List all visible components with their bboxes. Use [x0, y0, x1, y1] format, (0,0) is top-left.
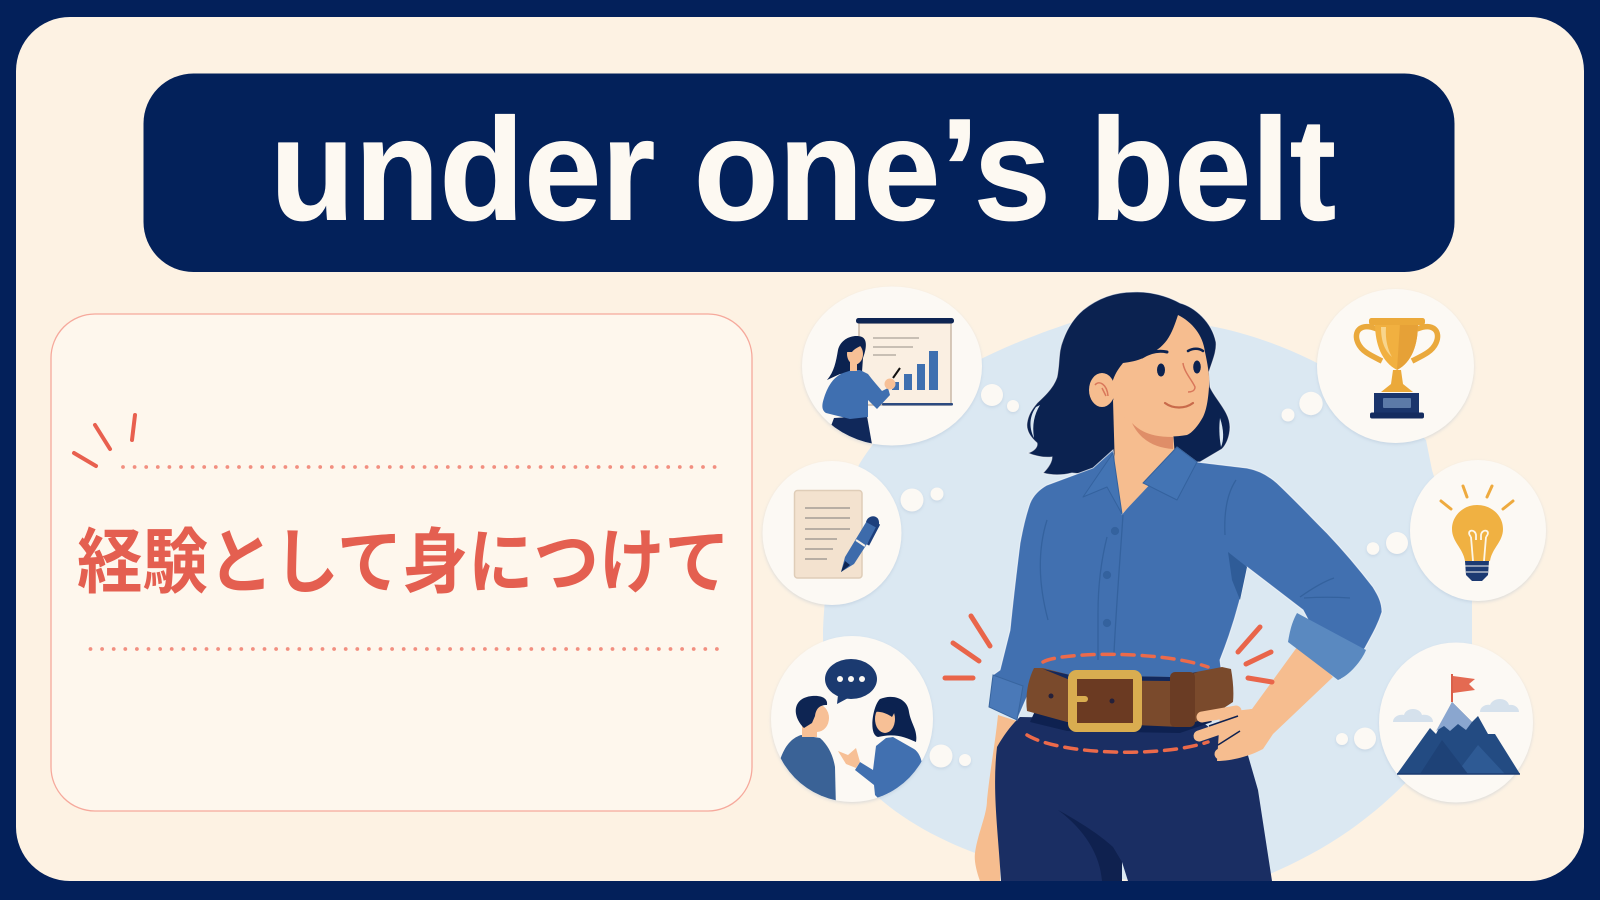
circle: trophy	[1317, 289, 1474, 443]
shirt	[989, 447, 1382, 720]
face	[1113, 315, 1209, 436]
icon: mountain with flag	[1397, 674, 1520, 774]
thought bubbles	[900, 384, 1408, 768]
trousers	[995, 717, 1272, 881]
neck shadow	[1132, 423, 1173, 449]
right hand with fingers	[1199, 709, 1262, 757]
emphasis lines right	[1238, 627, 1272, 682]
presenter figure	[822, 336, 900, 450]
hair back	[1027, 292, 1230, 476]
eyes and brows	[1142, 349, 1203, 376]
circle: document	[762, 461, 902, 605]
mouth	[1165, 403, 1193, 408]
circle: presentation	[802, 286, 982, 450]
right sleeve cuff	[1288, 613, 1366, 680]
trouser fold	[1058, 810, 1122, 881]
circle: summit	[1379, 642, 1533, 802]
pen	[841, 516, 879, 572]
buckle	[1068, 674, 1138, 728]
arm gap	[1228, 552, 1247, 600]
left forearm	[975, 715, 1020, 881]
title text: under one’s belt	[270, 88, 1336, 250]
meaning text: 経験として身につけて	[77, 524, 730, 603]
ear	[1089, 373, 1115, 407]
icon: sparkle accent	[74, 415, 135, 466]
dotted rule bottom	[90, 647, 720, 651]
right forearm	[1217, 643, 1333, 761]
nose	[1183, 363, 1195, 392]
paper	[794, 490, 862, 578]
clouds	[1393, 699, 1519, 722]
circle: conversation	[771, 636, 933, 810]
title banner	[144, 74, 1454, 272]
speech bubble	[825, 659, 877, 704]
shirt details	[1040, 480, 1350, 660]
icon: light bulb	[1441, 486, 1513, 581]
dotted rule top	[123, 465, 720, 469]
dashed waist marker	[1027, 654, 1208, 752]
two people	[780, 696, 922, 810]
woman figure	[945, 292, 1382, 881]
belt	[1026, 667, 1233, 733]
hair highlights	[1030, 405, 1223, 447]
icon: trophy	[1356, 318, 1438, 418]
collar	[1083, 447, 1197, 514]
bottom frame edge	[0, 881, 1600, 900]
light blue backdrop	[823, 320, 1472, 890]
emphasis lines left	[945, 616, 990, 678]
left sleeve cuff	[989, 675, 1023, 720]
circle: idea	[1410, 460, 1546, 601]
neck	[1113, 400, 1175, 514]
panel: meaning	[51, 314, 752, 811]
presentation screen	[856, 318, 954, 406]
